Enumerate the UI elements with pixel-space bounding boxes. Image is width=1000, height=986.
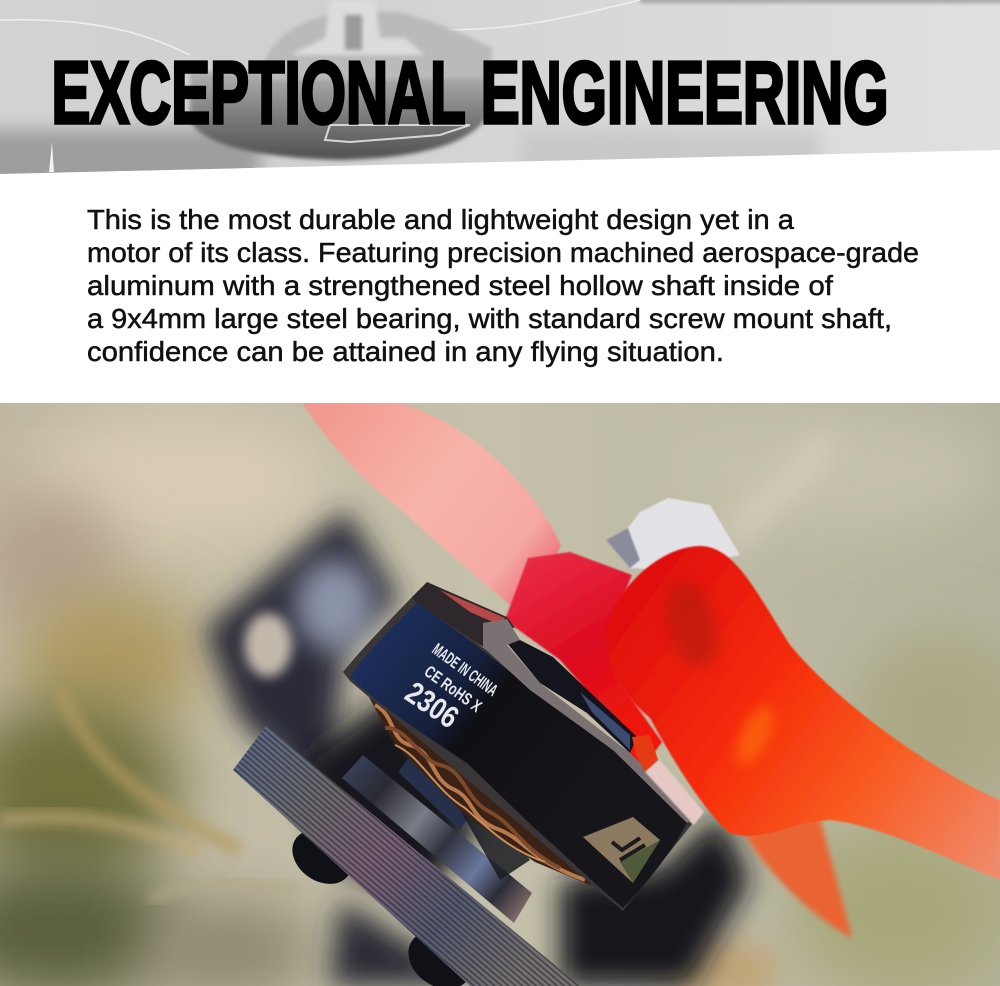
- panel: description text area: [0, 150, 1000, 368]
- orange reflection on motor: [632, 735, 658, 772]
- silver motor bolt: [606, 498, 740, 570]
- motor bell opening: [507, 640, 637, 753]
- motor label text: MADE IN CHINA: [429, 640, 501, 700]
- description paragraph: motor of its class. Featuring precision machined aerospace-grade: [87, 237, 919, 268]
- blurred drone frame behind motor: [205, 510, 750, 986]
- motor standoffs: [342, 745, 532, 923]
- pale reflection beside motor: [645, 760, 704, 825]
- panel: header photo with title: [0, 0, 1000, 174]
- motor label text: CE RoHS X: [421, 662, 486, 716]
- black motor body: [343, 582, 704, 911]
- motor top rim: [412, 582, 515, 647]
- motor label text: 2306: [399, 675, 465, 735]
- description paragraph: aluminum with a strengthened steel hollow shaft inside of: [87, 270, 833, 301]
- motor label text: [399, 640, 501, 735]
- motor brand mark: [583, 817, 660, 883]
- header background: [0, 0, 1000, 190]
- description paragraph: a 9x4mm large steel bearing, with standard screw mount shaft,: [87, 303, 892, 334]
- motor windings: [360, 670, 610, 885]
- white slanted background: [0, 150, 1000, 404]
- description paragraph: [87, 204, 919, 367]
- mounting plate: [233, 726, 580, 986]
- lower propeller tip: [745, 818, 852, 938]
- description paragraph: confidence can be attained in any flying situation.: [87, 336, 724, 367]
- mounting screws: [282, 819, 483, 986]
- propeller shading: [657, 576, 781, 770]
- front red propeller blade: [606, 546, 1000, 880]
- light metal rim strip: [483, 619, 697, 823]
- description paragraph: This is the most durable and lightweight design yet in a: [87, 204, 794, 235]
- panel: motor and propeller photo illustration: [0, 403, 1000, 986]
- rear propeller blade: [302, 403, 561, 620]
- blurred background: [0, 403, 1000, 986]
- red propeller hub: [505, 552, 662, 772]
